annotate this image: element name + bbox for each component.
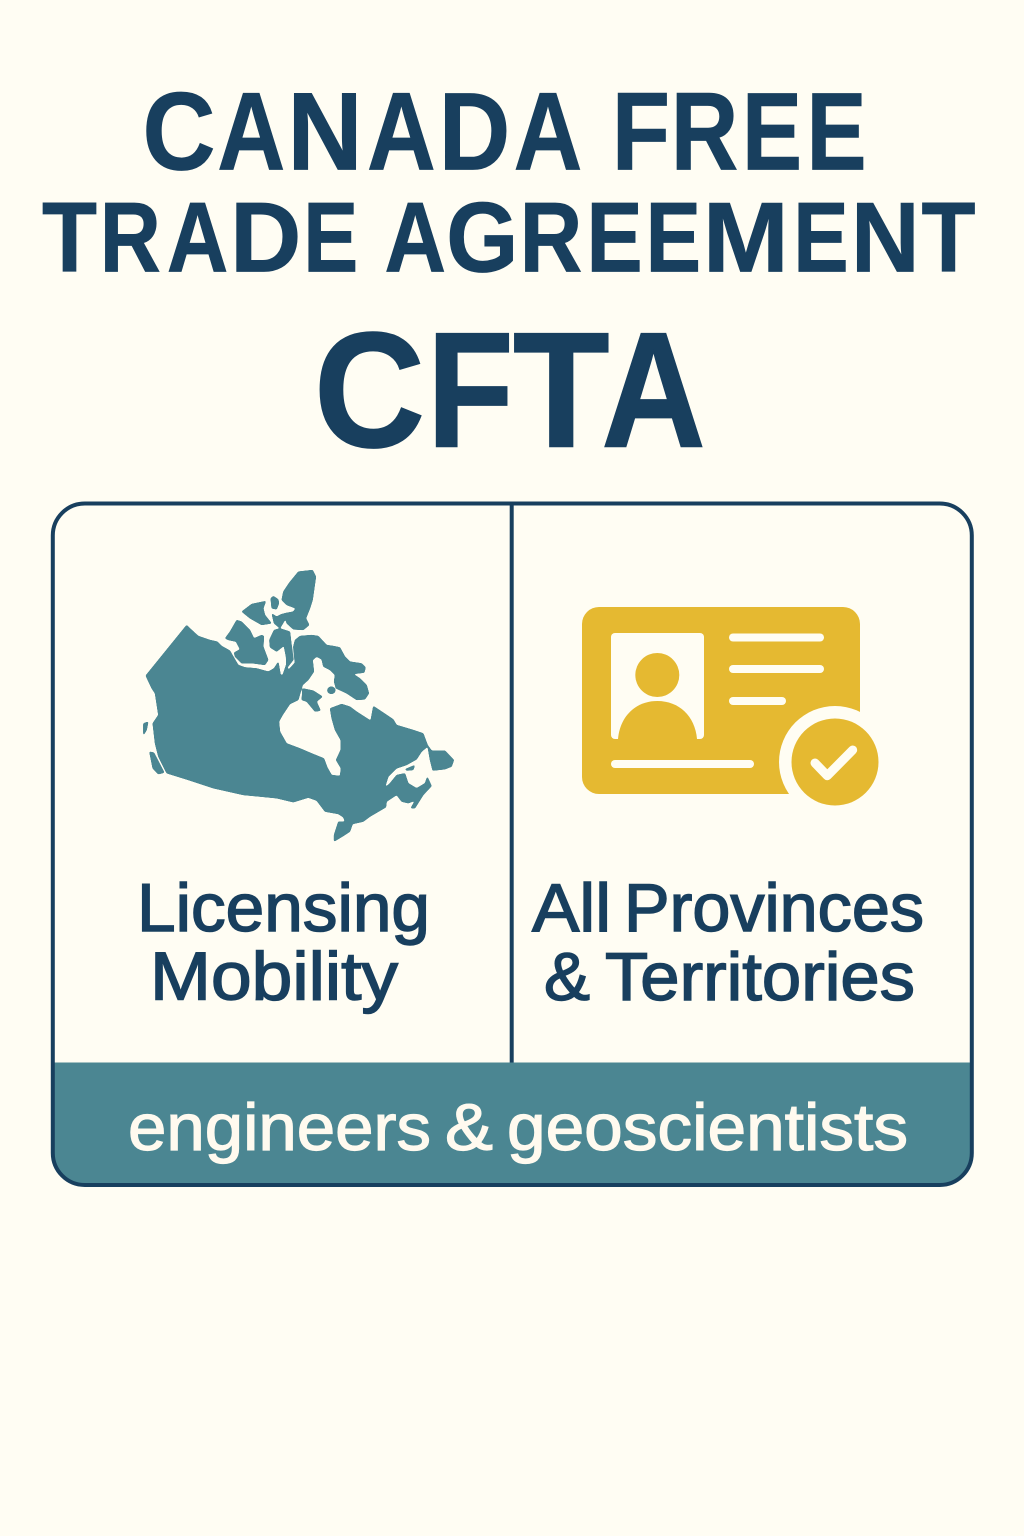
- acronym CFTA: C: [314, 298, 425, 482]
- title: T: [922, 182, 976, 293]
- panel: main card: [53, 504, 972, 1185]
- check badge: [779, 706, 891, 818]
- label: Licensing Mobility: Licensing: [137, 870, 430, 946]
- title: A: [167, 182, 228, 293]
- title: E: [793, 182, 849, 293]
- title: A: [367, 71, 436, 194]
- acronym CFTA: A: [602, 298, 706, 482]
- title: A: [384, 182, 446, 293]
- person: [635, 653, 679, 697]
- title: D: [439, 71, 510, 194]
- label: Licensing Mobility: Mobility: [150, 938, 398, 1014]
- label: Licensing Mobility: [137, 870, 430, 1014]
- title: N: [287, 71, 363, 194]
- icon: map of Canada: [143, 570, 454, 842]
- title: A: [217, 71, 285, 194]
- banner: engineers and geoscientists: &: [445, 1090, 493, 1164]
- title: F: [612, 71, 670, 194]
- panel background: [53, 504, 972, 1185]
- photo frame: [611, 633, 704, 739]
- banner: engineers and geoscientists: geoscientists: [507, 1090, 908, 1164]
- title: A: [514, 71, 582, 194]
- acronym CFTA: T: [513, 298, 610, 482]
- label: All Provinces and Territories: [532, 870, 924, 1015]
- panel divider: [510, 504, 514, 1062]
- label: All Provinces and Territories: Provinces: [624, 870, 924, 946]
- title: G: [446, 182, 518, 293]
- acronym CFTA: F: [427, 298, 514, 482]
- banner: engineers and geoscientists: engineers: [128, 1090, 431, 1164]
- label: All Provinces and Territories: &: [544, 939, 590, 1015]
- title: R: [520, 182, 582, 293]
- text lines: [611, 634, 824, 768]
- title: C: [142, 71, 216, 194]
- title: R: [671, 71, 738, 194]
- title: E: [806, 71, 866, 194]
- title: R: [100, 182, 161, 293]
- title: E: [646, 182, 701, 293]
- title: E: [303, 182, 358, 293]
- panel border: [53, 504, 972, 1185]
- title: E: [742, 71, 802, 194]
- title: E: [586, 182, 643, 293]
- icon: ID card with check badge: [582, 607, 891, 818]
- title: [42, 71, 976, 293]
- banner: engineers and geoscientists: [53, 1062, 972, 1185]
- title: N: [851, 182, 920, 293]
- title: D: [230, 182, 301, 293]
- title: M: [703, 182, 789, 293]
- label: All Provinces and Territories: All: [532, 870, 611, 946]
- label: All Provinces and Territories: Territories: [605, 939, 915, 1015]
- title: T: [42, 182, 97, 293]
